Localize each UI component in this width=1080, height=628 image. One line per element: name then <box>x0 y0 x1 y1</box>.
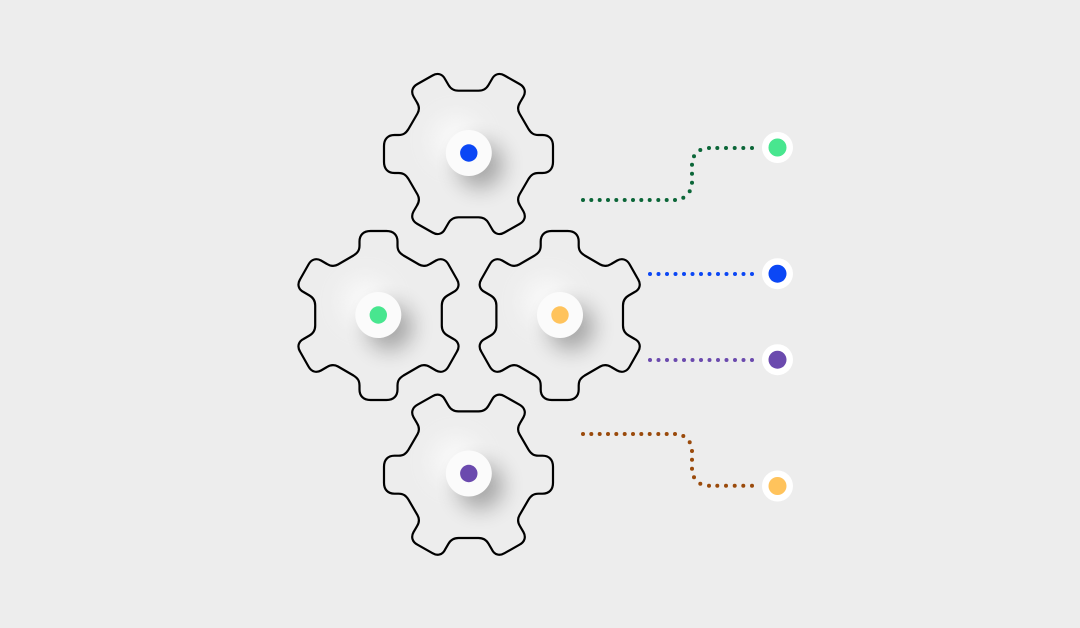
connector: purple dotted line <box>648 358 754 362</box>
marker: green <box>762 132 793 163</box>
marker: purple <box>762 344 793 375</box>
gear: right, yellow hub <box>480 231 640 400</box>
marker: blue <box>762 258 793 289</box>
connector: brown dotted line <box>581 432 754 488</box>
gear: left, green hub <box>298 231 459 400</box>
marker: yellow <box>762 470 793 502</box>
connector: green dotted line <box>581 146 754 202</box>
gear: bottom, purple hub <box>384 395 553 555</box>
connector: blue dotted line <box>648 272 754 276</box>
gear: top, blue hub <box>384 74 553 234</box>
